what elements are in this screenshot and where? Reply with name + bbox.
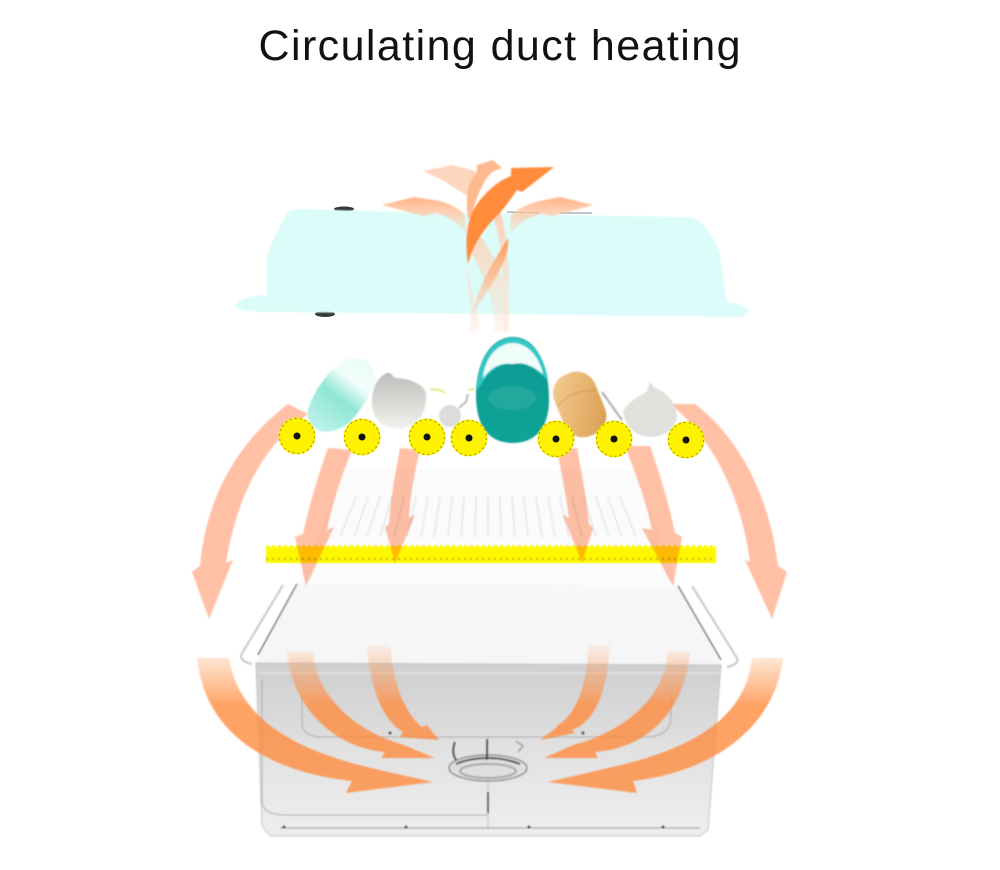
main orange arrow xyxy=(466,167,554,264)
arrow lower left inner xyxy=(367,645,439,740)
arrow third left xyxy=(385,448,420,563)
left rim xyxy=(258,584,297,655)
rising air spiral xyxy=(382,160,593,332)
arrow third right xyxy=(557,448,593,563)
green sprout marks xyxy=(430,389,474,393)
arrow second right xyxy=(625,446,682,586)
lid knob left top xyxy=(334,206,354,212)
box screws xyxy=(282,732,664,828)
egg: gray right xyxy=(623,382,677,437)
arrow lower right inner xyxy=(540,645,610,740)
strand right xyxy=(492,208,509,332)
egg: small gray xyxy=(439,394,468,427)
roller 5 xyxy=(538,420,574,458)
arrow outer right xyxy=(670,404,787,619)
arrow lower left middle xyxy=(287,652,435,758)
egg: teal large xyxy=(476,337,549,443)
box body xyxy=(256,663,721,836)
left rim lip xyxy=(241,585,283,664)
box inner lines xyxy=(258,673,720,830)
arrow lower right outer xyxy=(548,658,783,793)
pale strand xyxy=(470,236,508,332)
upper air arrows xyxy=(192,404,787,619)
title: Circulating duct heating xyxy=(258,22,740,70)
turning rollers xyxy=(278,418,704,458)
strand left tail xyxy=(467,266,479,332)
egg: gold xyxy=(547,366,612,443)
pale rear arrow xyxy=(423,165,478,197)
transparent base box xyxy=(241,584,738,836)
arrow lower left outer xyxy=(197,658,433,793)
roller 2 xyxy=(344,418,380,456)
drain hole xyxy=(449,739,527,813)
lid xyxy=(235,206,749,317)
roller 4 xyxy=(450,420,488,456)
heating bar xyxy=(266,546,716,563)
eggs xyxy=(308,337,677,443)
roller 3 xyxy=(408,418,446,456)
arrow second left xyxy=(295,448,352,586)
faint backing panel behind the vent grid xyxy=(297,470,678,586)
lid body xyxy=(235,209,749,317)
right rim lip xyxy=(692,586,738,667)
arrow lower right middle xyxy=(544,652,690,758)
lid knob left bottom xyxy=(315,311,335,317)
egg: mint xyxy=(308,358,375,432)
arrow outer left xyxy=(192,404,308,619)
tray upper panel xyxy=(256,584,722,665)
egg: gray left xyxy=(372,373,426,429)
shell fragment right xyxy=(602,392,622,420)
lower converging air arrows xyxy=(197,645,783,793)
orange strand xyxy=(471,238,508,332)
roller 7 xyxy=(668,422,704,458)
left arrow xyxy=(382,197,467,235)
roller 6 xyxy=(596,420,632,458)
roller 1 xyxy=(278,418,316,454)
vent grid plate xyxy=(340,497,636,537)
lid top edge line xyxy=(507,212,592,213)
right arrow xyxy=(510,197,593,235)
small rising arrow xyxy=(467,160,502,218)
right rim xyxy=(678,586,721,660)
